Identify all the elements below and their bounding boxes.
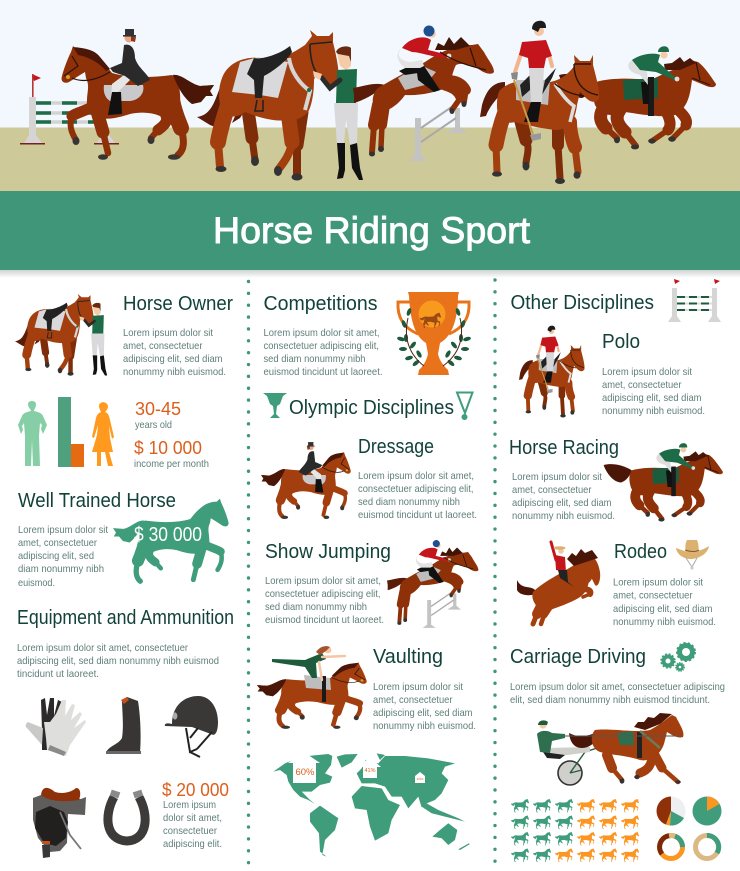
label: years old [135,419,172,431]
icon: green trophy [263,393,287,418]
text block [264,327,382,378]
text block: nonummy nibh euismod. [512,510,615,522]
bar chart [58,397,84,467]
icon: hurdle [668,279,721,322]
heading: Equipment and Ammunition [17,607,234,629]
illustration: bucking horse [517,542,600,624]
panel: polo [519,326,705,418]
panel: horse racing [509,437,723,522]
panel: equipment and ammunition [17,607,234,858]
text block: amet, consectetuer [512,484,592,496]
text block [265,575,384,626]
text block: adipiscing elit, sed diam [373,707,473,719]
text block: Lorem ipsum dolor sit amet, [265,575,381,587]
text block: Lorem ipsum dolor sit [123,327,213,339]
panel: vaulting [257,646,476,732]
text block: adipiscing elit, sed diam [123,353,223,365]
text block: Lorem ipsum dolor sit amet, consectetuer [17,642,188,654]
text block [510,681,725,706]
text block [613,576,716,628]
heading: Olympic Disciplines [289,397,454,419]
text block: Lorem ipsum dolor sit amet, [358,470,474,482]
text block: Lorem ipsum dolor sit [373,681,463,693]
text block: adipiscing elit, sed [18,550,94,562]
text block: adipiscing elit. [163,838,222,850]
panel: olympic disciplines header [263,392,472,420]
text block: nonummy nibh euismod. [602,405,705,417]
panel: competitions [264,292,471,378]
text block: adipiscing elit, sed diam [613,603,713,615]
panel: carriage driving [510,643,725,785]
world map [273,752,470,857]
icon: medal [457,392,472,420]
icon: riding boot [106,697,141,754]
heading: Vaulting [373,646,443,668]
text block [512,471,615,522]
illustration: vaulting horse [257,646,367,729]
stat: income: $ 10 000 [134,438,202,458]
illustration: racehorse [604,443,723,522]
illustration: jumping horse [387,540,478,628]
text block: Lorem ipsum [163,799,216,811]
show jumping horse [353,26,494,161]
text block: nonummy nibh euismod. [613,616,716,628]
icon: riding helmet [165,696,218,757]
heading: Horse Racing [509,437,619,459]
heading: Competitions [264,293,378,315]
heading: Horse Owner [123,293,233,315]
dressage horse and rider [62,29,214,160]
text block: nonummy nibh euismod. [123,366,226,378]
text block: amet, consectetuer [373,694,453,706]
heading: Other Disciplines [510,292,654,314]
text block: adipiscing elit, sed diam [512,497,612,509]
heading: Polo [602,331,640,353]
stat: age: 30-45 [135,399,181,419]
text block: Lorem ipsum dolor sit [602,366,692,378]
heading: Well Trained Horse [18,490,176,512]
donut chart: four segments [660,835,682,858]
illustration: harness horse and sulky [537,713,683,785]
pie chart: green orange [692,796,722,826]
text block: sed diam nonummy nibh [264,353,366,365]
panel: show jumping [265,540,478,628]
panel: rodeo [517,540,716,628]
title: Horse Riding Sport [213,210,531,251]
pictogram: horse icon grid [511,799,639,862]
text block: euismod tincidunt ut laoreet. [265,614,384,626]
text block: euismod. [18,577,55,589]
text block: sed diam nonummy nibh [358,496,460,508]
icon: horseshoe [108,791,145,841]
racing horse and jockey [559,46,716,149]
text block [123,327,226,378]
text block: consectetuer adipiscing elit, [265,588,380,600]
text block: elit, sed diam nonummy nibh euismod tincidunt. [510,694,710,706]
text block: amet, consectetuer [602,379,682,391]
hero scene [0,0,740,192]
owner with horse [197,30,363,180]
house marker 60% [288,752,320,783]
heading: Carriage Driving [510,646,646,668]
house marker 10% [415,772,425,783]
house marker 60%: 60% [296,767,314,777]
text block: adipiscing elit, sed diam [602,392,702,404]
text block: adipiscing elit, sed diam nonummy nibh euismod [17,655,219,667]
polo horse and rider [480,21,599,184]
text block [163,799,222,850]
illustration: owner and horse [15,294,107,376]
icon: cowboy hat [676,540,709,570]
icon: gloves [26,698,86,756]
icon: man silhouette [18,401,47,466]
text block: consectetuer adipiscing elit, [358,483,474,495]
text block: Lorem ipsum dolor sit [512,471,602,483]
heading: Rodeo [614,541,667,563]
label: income per month [134,458,209,470]
text block: Lorem ipsum dolor sit [613,576,703,588]
text block: tincidunt ut laoreet. [17,668,99,680]
panel: dressage [261,436,477,521]
text block: euismod tincidunt ut laoreet. [264,366,382,378]
illustration: dressage horse [261,442,351,519]
text block: sed diam nonummy nibh [265,601,367,613]
icon: trophy with laurel [397,292,471,375]
text block: dolor sit amet, [163,812,222,824]
jump obstacle with flag [20,74,119,144]
icon: horse silhouette with price [113,499,229,581]
text block [373,681,476,732]
text block: nonummy nibh euismod. [373,720,476,732]
house marker 41%: 41% [364,768,376,774]
house marker 41% [359,757,381,778]
donut chart: green and tan [696,835,719,858]
text block: amet, consectetuer [613,590,693,602]
text block: diam nonummy nibh [18,563,104,575]
icon: saddle [33,788,86,858]
text block: consectetuer adipiscing elit, [264,340,379,352]
text block: amet, consectetuer [18,537,97,549]
text block: euismod tincidunt ut laoreet. [358,509,477,521]
text block: amet, consectetuer [123,340,203,352]
pie chart: brown grey green [656,796,686,826]
text block [358,470,477,521]
heading: Show Jumping [265,541,391,563]
text block [18,524,108,589]
panel: owner demographics [18,397,209,470]
text block: Lorem ipsum dolor sit [18,524,108,536]
stat: price: $ 20 000 [162,780,229,800]
panel: well trained horse [18,490,229,589]
text block: Lorem ipsum dolor sit amet, [264,327,380,339]
panel: horse owner [15,293,233,378]
icon: woman silhouette [92,402,114,466]
heading: Dressage [358,436,434,458]
title band [0,191,740,278]
panel: other disciplines [510,279,721,322]
icon: horse silhouette with price: $ 30 000 [134,524,202,546]
text block: consectetuer [163,825,217,837]
house marker 10%: 10% [416,777,424,781]
text block [17,642,219,680]
illustration: polo rider [519,326,585,418]
icon: gears [661,643,695,671]
text block [602,366,705,417]
